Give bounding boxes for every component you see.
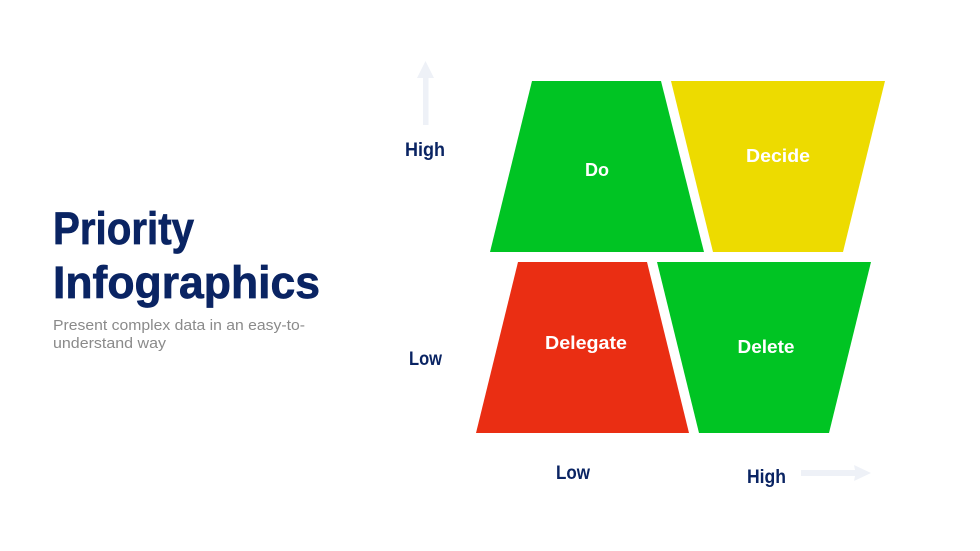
panel: do: Do: [585, 160, 609, 180]
horizontal axis label low: Low: [556, 463, 590, 484]
subtitle text: understand way: [53, 335, 167, 352]
panel: delegate: [476, 262, 689, 433]
title: [53, 203, 320, 308]
subtitle text: Present complex data in an easy-to-: [53, 317, 305, 334]
panel: decide: Decide: [746, 146, 810, 166]
subtitle text: [53, 317, 305, 352]
title: Priority: [53, 203, 194, 254]
panel: do: [490, 81, 704, 252]
panel: delete: Delete: [738, 337, 794, 357]
vertical axis label low: Low: [409, 349, 442, 370]
panel: delegate: Delegate: [545, 333, 627, 353]
icon: horizontal axis arrow: [801, 465, 871, 481]
panel: decide: [671, 81, 885, 252]
title: Infographics: [53, 257, 320, 308]
icon: vertical axis arrow: [417, 61, 434, 125]
panel: delete: [657, 262, 871, 433]
horizontal axis label high: High: [747, 467, 786, 488]
vertical axis label high: High: [405, 140, 445, 161]
